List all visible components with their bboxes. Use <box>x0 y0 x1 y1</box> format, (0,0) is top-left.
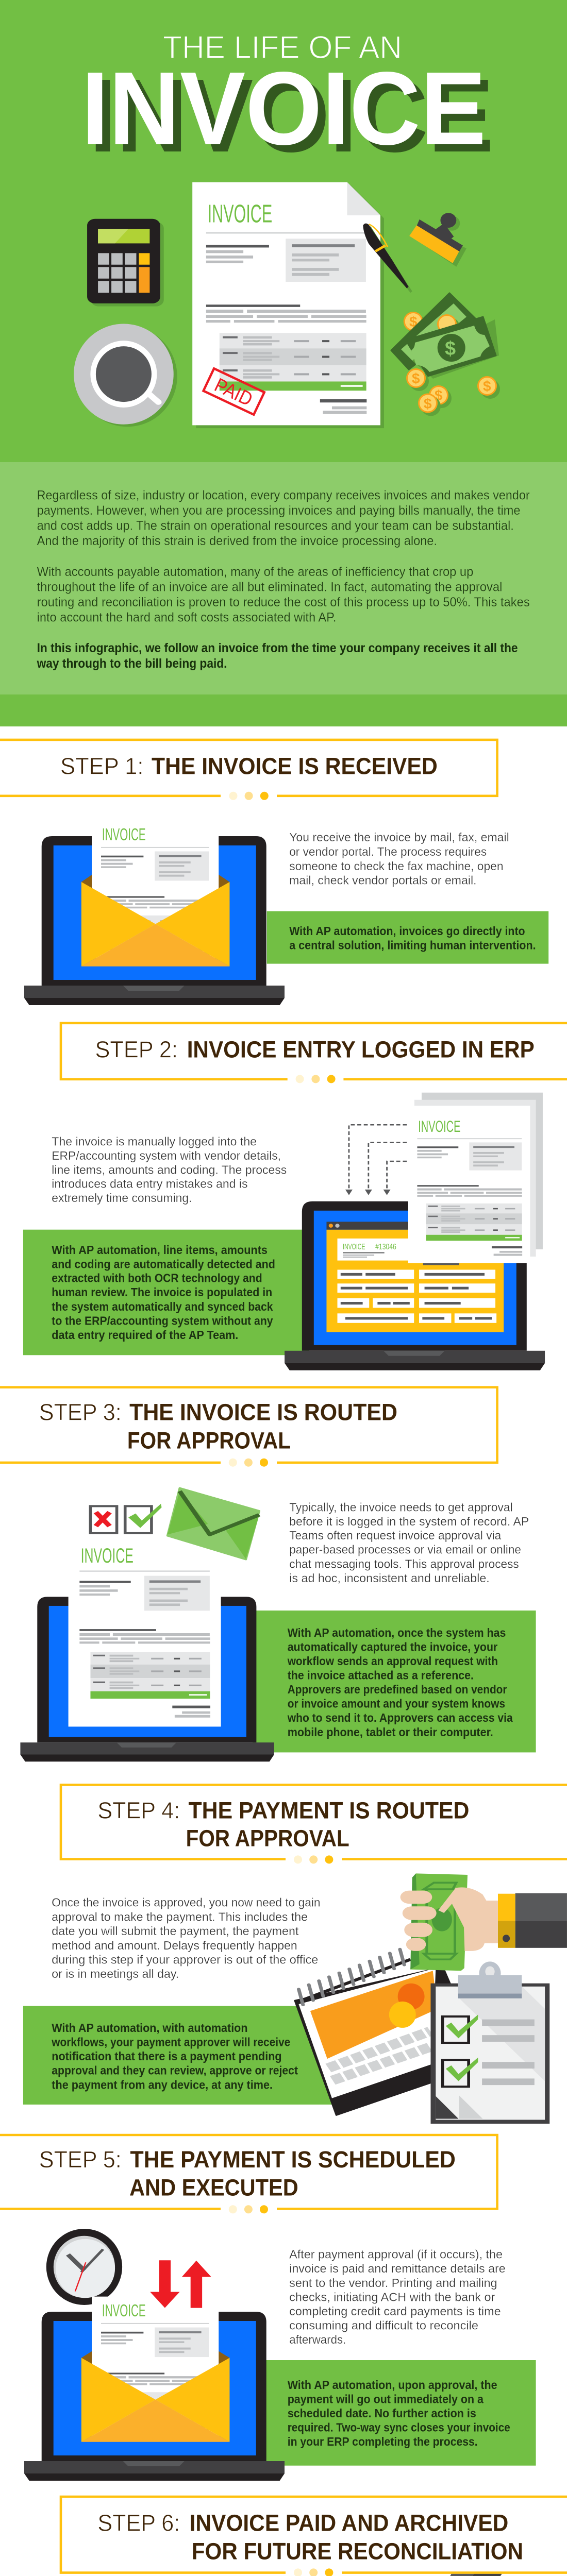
heading: step 5: AND EXECUTED <box>129 2175 298 2201</box>
illustration: laptop with invoice: INVOICE <box>81 1545 134 1567</box>
icon: money and coins <box>391 293 500 416</box>
panel: step 1 <box>0 740 548 1005</box>
icon: green envelope <box>168 1488 259 1560</box>
illustration: laptop with invoice in envelope <box>24 2289 285 2481</box>
illustration: main invoice document <box>192 182 384 428</box>
icon: money and coins: $ <box>409 314 418 330</box>
text: step 1 description: someone to check the fax machine, open <box>289 859 503 873</box>
icon: hand with money <box>401 1873 567 1971</box>
callout: step 2 automation: extracted with both OCR technology and <box>52 1272 262 1285</box>
callout: step 3 automation: automatically captured the invoice, your <box>288 1640 497 1654</box>
text: step 3 description: paper-based processes or via email or online <box>289 1543 521 1556</box>
callout: step 3 automation: Approvers are predefined based on vendor <box>288 1683 507 1696</box>
icon: money and coins: $ <box>483 378 491 394</box>
text: step 4 description: during this step if your approver is out of the office <box>52 1953 318 1966</box>
callout: step 4 automation: notification that there is a payment pending <box>52 2049 282 2063</box>
text: step 5 description: completing credit card payments is time <box>289 2304 501 2318</box>
heading: step 2 <box>61 1023 567 1083</box>
text: step 4 description <box>52 1896 321 1980</box>
illustration: laptop with invoice in envelope: INVOICE <box>102 2300 146 2320</box>
text: step 1 description: You receive the invoice by mail, fax, email <box>289 831 509 844</box>
callout: step 2 automation: to the ERP/accounting system without any <box>52 1314 273 1328</box>
heading: step 3: STEP 3: <box>39 1399 122 1425</box>
callout: step 2 automation: human review. The invoice is populated in <box>52 1285 272 1299</box>
icon: hand and sleeve <box>415 2574 502 2576</box>
icon: pen <box>363 224 412 293</box>
illustration: calendar, clipboard and hand with money <box>295 1873 567 2124</box>
icon: money and coins: $ <box>445 338 456 360</box>
text: step 1 description: or vendor portal. The process requires <box>289 845 487 858</box>
callout: step 2 automation: and coding are automatically detected and <box>52 1257 275 1270</box>
panel: introduction: Regardless of size, industry or location, every company receives invoices and makes vendor <box>37 488 530 502</box>
title: invoice: INVOICE <box>81 50 486 166</box>
text: step 1 description: mail, check vendor portals or email. <box>289 873 477 887</box>
panel: introduction: into account the hard and soft costs associated with AP. <box>37 610 336 624</box>
illustration: laptop with ERP form and invoice stack <box>285 1093 545 1370</box>
callout: step 4 automation: the payment from any device, at any time. <box>52 2078 273 2091</box>
heading: step 6 <box>61 2497 567 2576</box>
callout: step 5 automation <box>263 2360 536 2466</box>
callout: step 5 automation: payment will go out immediately on a <box>288 2392 483 2405</box>
callout: step 3 automation: or invoice amount and your system knows <box>288 1697 505 1710</box>
stamp: paid <box>204 368 264 415</box>
heading: step 5: STEP 5: <box>39 2146 122 2173</box>
callout: step 2 automation: the system automatically and synced back <box>52 1300 273 1313</box>
heading: step 5 <box>0 2135 497 2213</box>
panel: introduction: And the majority of this strain is derived from the invoice processing alone. <box>37 534 437 548</box>
arrows: dashed data flow <box>345 1125 407 1195</box>
panel: introduction: routing and reconciliation is proven to reduce the cost of this process up to 50%. This takes <box>37 595 530 609</box>
illustration: main invoice document: INVOICE <box>208 200 272 228</box>
illustration: laptop with invoice in envelope <box>24 813 285 1005</box>
heading: step 6: STEP 6: <box>97 2510 180 2536</box>
text: step 5 description: sent to the vendor. Printing and mailing <box>289 2276 497 2290</box>
icon: clock <box>46 2229 122 2305</box>
callout: step 1 automation: With AP automation, invoices go directly into <box>289 924 525 938</box>
illustration: laptop with invoice <box>20 1530 274 1761</box>
callout: step 3 automation: mobile phone, tablet or their computer. <box>288 1725 493 1739</box>
text: step 1 description <box>289 831 509 887</box>
icon: reject and approve boxes <box>90 1504 162 1533</box>
callout: step 1 automation <box>267 911 548 964</box>
callout: step 1 automation: a central solution, limiting human intervention. <box>289 939 536 952</box>
panel: header <box>0 0 567 726</box>
text: step 4 description: Once the invoice is approved, you now need to gain <box>52 1896 321 1909</box>
callout: step 2 automation: data entry required of the AP Team. <box>52 1328 238 1342</box>
icon: money and coins: $ <box>412 370 420 386</box>
heading: step 1: THE INVOICE IS RECEIVED <box>152 753 438 779</box>
callout: step 3 automation: who to send it to. Approvers can access via <box>287 1711 513 1724</box>
text: step 4 description: or is in meetings all day. <box>52 1967 179 1980</box>
text: step 3 description: is ad hoc, inconsistent and unreliable. <box>289 1571 490 1585</box>
icon: clipboard <box>430 1961 549 2124</box>
illustration: filing cabinet with hand <box>346 2574 567 2576</box>
text: step 4 description: method and amount. Delays frequently happen <box>52 1939 297 1952</box>
illustration: laptop with ERP form and invoice stack: #13046 <box>375 1243 396 1251</box>
heading: step 4: THE PAYMENT IS ROUTED <box>189 1797 469 1823</box>
heading: step 2: STEP 2: <box>95 1037 178 1062</box>
text: step 3 description: chat messaging tools. This approval process <box>289 1557 519 1570</box>
panel: step 4 <box>23 1785 567 2124</box>
callout: step 4 automation: workflows, your payment approver will receive <box>51 2036 290 2049</box>
callout: step 4 automation: With AP automation, with automation <box>52 2021 248 2035</box>
panel: step 6 <box>23 2497 567 2576</box>
icon: red transfer arrows <box>150 2260 211 2308</box>
icon: money and coins: $ <box>424 396 432 412</box>
title line: the life of an: THE LIFE OF AN <box>163 30 402 65</box>
text: step 3 description: Teams often request invoice approval via <box>289 1529 501 1542</box>
callout: step 3 automation <box>253 1611 536 1752</box>
panel: step 5 <box>0 2135 536 2481</box>
heading: step 4 <box>61 1785 567 1863</box>
callout: step 4 automation: approval and they can review, approve or reject <box>52 2064 298 2077</box>
icon: calculator <box>87 219 164 307</box>
text: step 2 description <box>52 1134 287 1205</box>
callout: step 3 automation: the invoice attached as a reference. <box>288 1669 474 1682</box>
panel: step 2 <box>23 1023 567 1370</box>
text: step 5 description: consuming and difficult to reconcile <box>289 2318 478 2332</box>
panel: introduction: payments. However, when you are processing invoices and paying bills manually, the time <box>37 503 521 518</box>
panel: introduction <box>0 462 567 694</box>
stamp: paid: PAID <box>211 375 256 411</box>
text: step 4 description: date you will submit the payment, the payment <box>52 1924 299 1938</box>
panel: step 3 <box>0 1387 536 1761</box>
title: invoice: INVOICE <box>89 57 494 174</box>
text: step 3 description: before it is logged in the system of record. AP <box>289 1515 529 1528</box>
callout: step 5 automation: in your ERP completing the process. <box>288 2435 478 2448</box>
callout: step 5 automation: required. Two-way sync closes your invoice <box>288 2420 510 2434</box>
panel: introduction: In this infographic, we follow an invoice from the time your company receives it all the <box>37 641 518 655</box>
heading: step 4: FOR APPROVAL <box>186 1825 349 1851</box>
heading: step 1 <box>0 740 497 800</box>
text: step 5 description: After payment approval (if it occurs), the <box>289 2248 503 2261</box>
illustration: laptop with ERP form and invoice stack: INVOICE <box>418 1117 460 1136</box>
text: step 5 description: checks, initiating ACH with the bank or <box>289 2290 495 2303</box>
callout: step 3 automation: workflow sends an approval request with <box>287 1654 498 1668</box>
heading: step 2: INVOICE ENTRY LOGGED IN ERP <box>187 1037 535 1062</box>
heading: step 3: THE INVOICE IS ROUTED <box>129 1399 397 1425</box>
text: step 2 description: The invoice is manually logged into the <box>52 1134 257 1148</box>
illustration: laptop with invoice in envelope: INVOICE <box>102 825 146 844</box>
icon: coffee cup <box>74 324 177 427</box>
text: step 2 description: ERP/accounting system with vendor details, <box>52 1149 281 1162</box>
icon: money and coins: $ <box>435 387 443 403</box>
heading: step 6: FOR FUTURE RECONCILIATION <box>192 2538 523 2564</box>
text: step 2 description: extremely time consuming. <box>52 1191 192 1205</box>
text: step 5 description: invoice is paid and remittance details are <box>289 2262 506 2275</box>
icon: calendar <box>295 1949 452 2115</box>
callout: step 2 automation <box>23 1230 309 1355</box>
panel: introduction: way through to the bill being paid. <box>37 656 227 671</box>
panel: introduction: throughout the life of an invoice are all but eliminated. In fact, automating the approval <box>37 580 502 594</box>
callout: step 5 automation: scheduled date. No further action is <box>288 2406 476 2420</box>
heading: step 6: INVOICE PAID AND ARCHIVED <box>190 2510 508 2536</box>
text: step 5 description <box>289 2248 506 2346</box>
text: step 5 description: afterwards. <box>289 2333 346 2346</box>
panel: introduction: and cost adds up. The strain on operational resources and your team can be substantial. <box>37 518 514 533</box>
callout: step 4 automation <box>23 2006 343 2105</box>
heading: step 3 <box>0 1387 497 1467</box>
panel: introduction: With accounts payable automation, many of the areas of inefficiency that crop up <box>37 565 473 579</box>
callout: step 5 automation: With AP automation, upon approval, the <box>288 2378 497 2392</box>
heading: step 1: STEP 1: <box>60 753 143 779</box>
text: step 3 description <box>289 1501 529 1585</box>
heading: step 5: THE PAYMENT IS SCHEDULED <box>130 2146 456 2173</box>
text: step 4 description: approval to make the payment. This includes the <box>52 1910 308 1923</box>
heading: step 3: FOR APPROVAL <box>127 1428 291 1454</box>
text: step 2 description: line items, amounts and coding. The process <box>52 1163 287 1176</box>
text: step 3 description: Typically, the invoice needs to get approval <box>289 1501 513 1514</box>
icon: rubber stamp <box>409 213 466 267</box>
text: step 2 description: introduces data entry mistakes and is <box>52 1177 248 1191</box>
heading: step 4: STEP 4: <box>97 1797 180 1823</box>
callout: step 2 automation: With AP automation, line items, amounts <box>52 1243 268 1257</box>
callout: step 3 automation: With AP automation, once the system has <box>288 1626 506 1639</box>
illustration: laptop with ERP form and invoice stack: INVOICE <box>343 1243 365 1251</box>
